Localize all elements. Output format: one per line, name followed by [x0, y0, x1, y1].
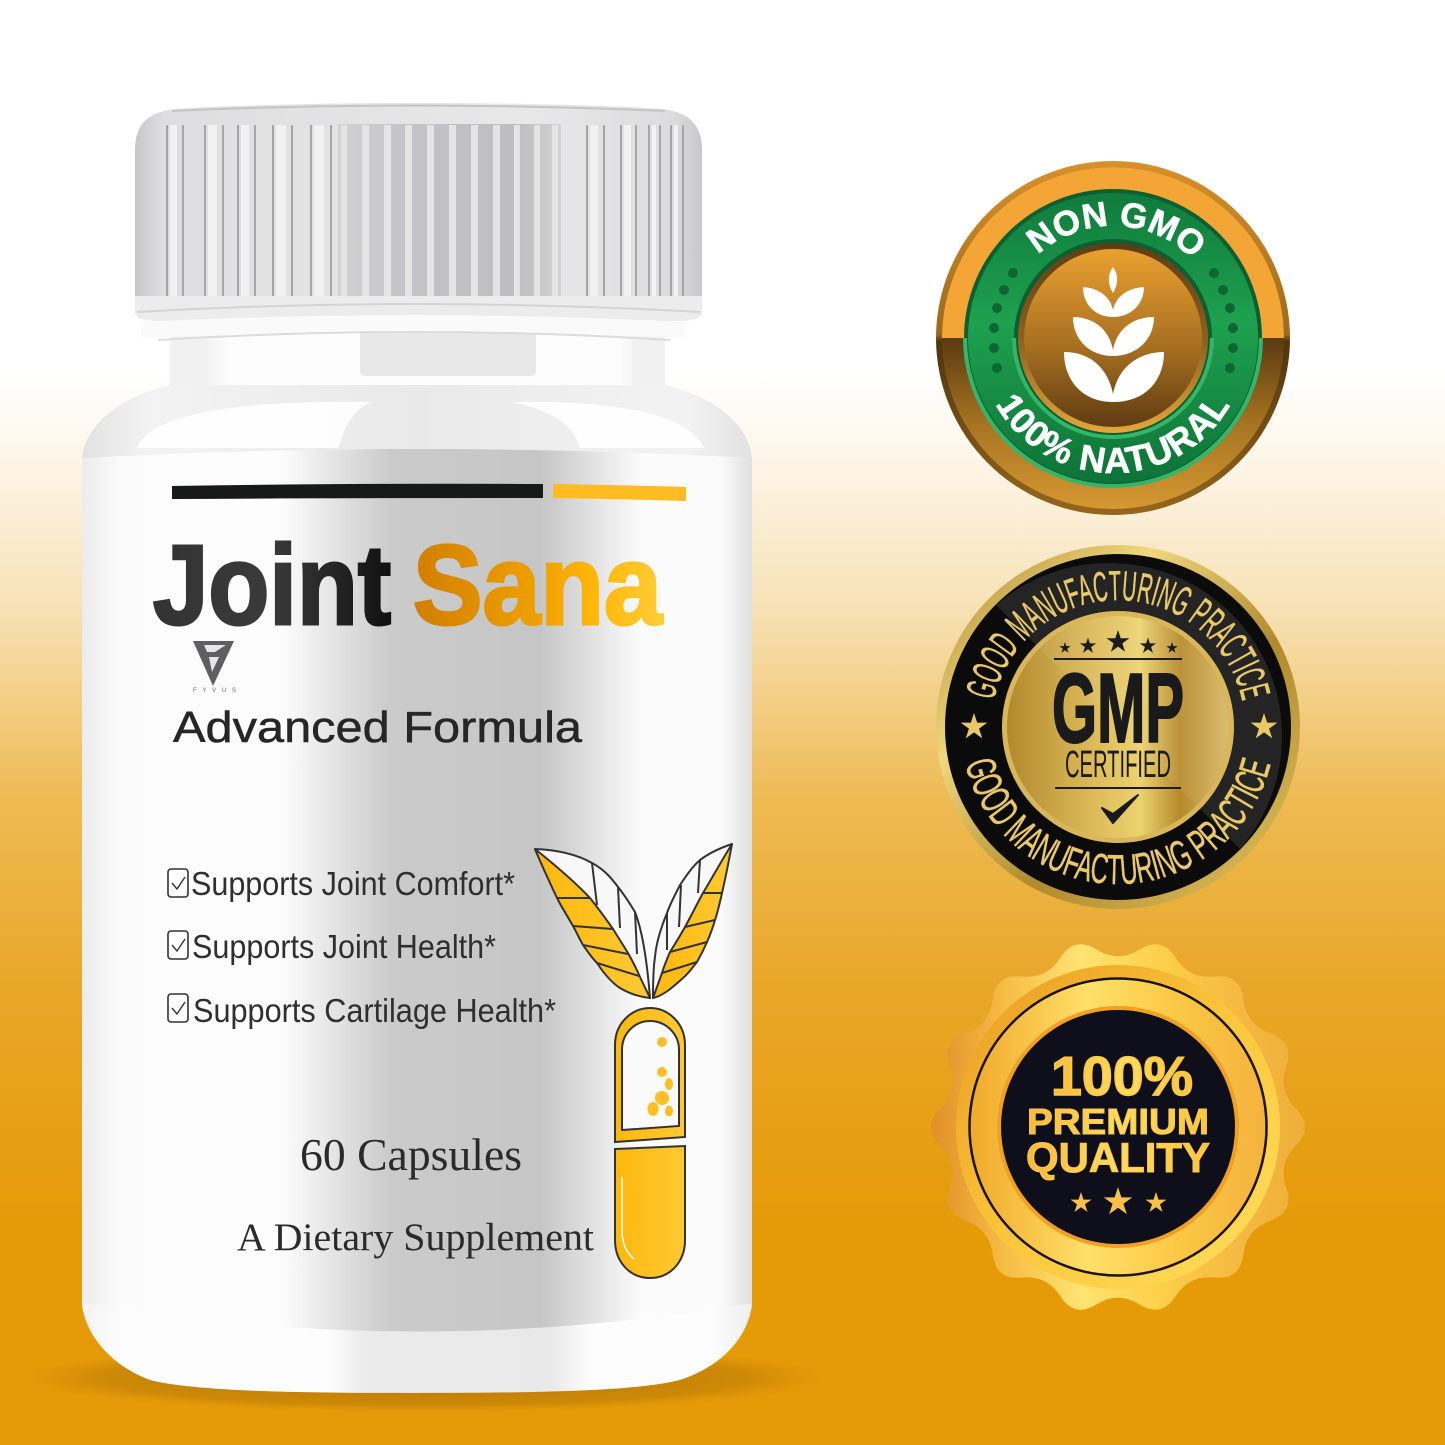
green ring dots [989, 268, 1238, 373]
rating stars [1059, 630, 1178, 653]
icon: leaves [535, 844, 732, 998]
benefit: cartilage health: Supports Cartilage Health* [193, 992, 556, 1029]
benefit: joint health: Supports Joint Health* [192, 928, 496, 965]
seal edge [931, 944, 1305, 1310]
text: PREMIUM: PREMIUM [1027, 1101, 1209, 1142]
text: good manufacturing practice, bottom: GOOD MANUFACTURING PRACTICE [966, 757, 1271, 884]
badge: 100% premium quality [931, 944, 1305, 1310]
bottle flange [141, 315, 686, 338]
center medallion [1002, 611, 1234, 843]
logo: FYVUS [193, 641, 236, 694]
bottle body [82, 380, 752, 1395]
brand name: Joint Sana [153, 522, 663, 648]
text: QUALITY: QUALITY [1026, 1134, 1210, 1181]
label top bars [172, 484, 686, 501]
icon: check mark [1102, 795, 1138, 823]
logo: FYVUS: FYVUS [193, 688, 236, 694]
text: good manufacturing practice, top: GOOD MANUFACTURING PRACTICE [966, 570, 1270, 701]
bottle shadow [25, 1344, 825, 1412]
text: 60 Capsules: 60 Capsules [300, 1129, 522, 1180]
supplement bottle [82, 103, 752, 1395]
icon: capsule [615, 1008, 685, 1278]
text: GMP: GMP [1052, 653, 1184, 763]
bottle neck [170, 330, 665, 395]
bottle cap [135, 103, 702, 340]
brand name: Joint Sana: Sana [413, 522, 663, 648]
benefit list [168, 865, 556, 1029]
badge: Non GMO 100% Natural [936, 161, 1290, 515]
subtitle: Advanced Formula: Advanced Formula [173, 703, 583, 752]
icon: wheat [1064, 267, 1164, 402]
text: NON GMO: NON GMO [1025, 202, 1204, 254]
cap ribs [166, 125, 684, 296]
text: A Dietary Supplement: A Dietary Supplement [237, 1216, 594, 1259]
side stars [961, 713, 1277, 738]
badge: GMP certified [936, 545, 1300, 909]
text: 100% NATURAL: 100% NATURAL [996, 394, 1230, 474]
benefit: joint comfort: Supports Joint Comfort* [191, 865, 515, 902]
text: 100%: 100% [1051, 1045, 1193, 1107]
brand name: Joint Sana: Joint [153, 522, 391, 648]
three stars [1071, 1187, 1166, 1214]
text: CERTIFIED: CERTIFIED [1065, 744, 1171, 786]
